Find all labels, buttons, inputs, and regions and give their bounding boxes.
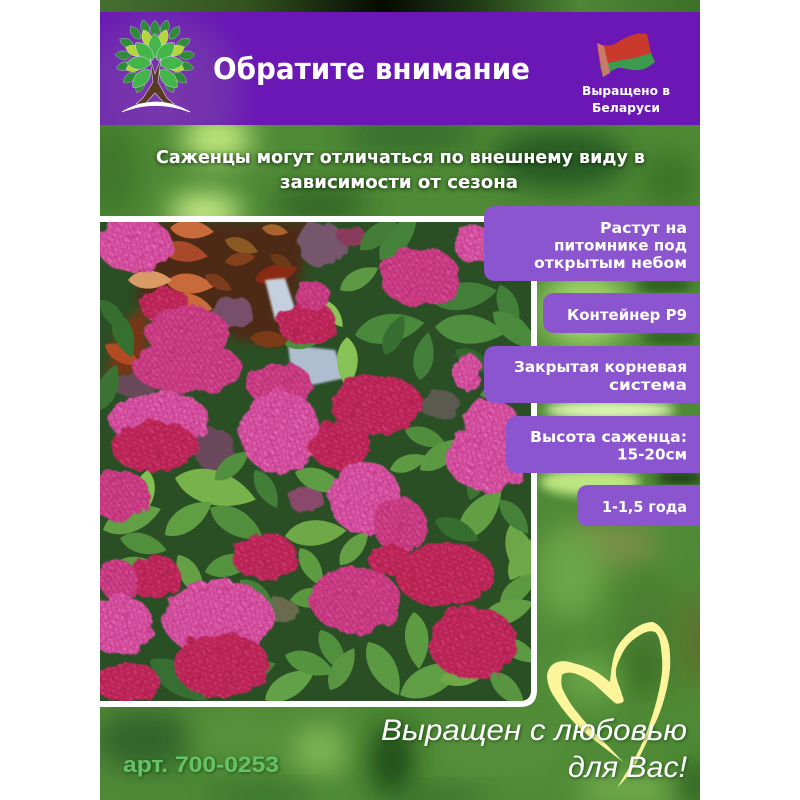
flag caption: Беларуси	[592, 100, 660, 115]
pill: height: 15-20см	[617, 446, 687, 464]
notice text: зависимости от сезона	[280, 173, 518, 193]
icon: Belarus flag	[597, 34, 655, 77]
icon: yellow heart	[547, 622, 670, 788]
pill: nursery: открытым небом	[534, 254, 687, 272]
photo: pink spirea shrub	[100, 222, 531, 701]
pill: age	[577, 485, 700, 526]
pill: nursery: Растут на	[600, 219, 687, 237]
pill: root system	[484, 346, 700, 403]
header band	[100, 12, 700, 125]
pill: height: Высота саженца:	[530, 428, 687, 446]
pill: container: Контейнер Р9	[567, 306, 687, 324]
notice text	[156, 148, 645, 193]
flag caption	[582, 83, 670, 115]
pill: root system: система	[609, 376, 687, 394]
photo frame	[100, 216, 537, 707]
pill: nursery: питомнике под	[554, 236, 687, 254]
tagline: для Вас!	[568, 751, 688, 784]
pill: age: 1-1,5 года	[602, 498, 687, 516]
background: blurred green foliage	[80, 0, 712, 800]
pill: root system: Закрытая корневая	[514, 358, 687, 376]
tagline: Выращен с любовью	[381, 714, 687, 747]
autumn shrub	[101, 219, 460, 622]
pill: height	[506, 416, 700, 473]
icon: tree logo	[115, 19, 195, 112]
flower clusters	[86, 218, 528, 702]
flag caption: Выращено в	[582, 83, 670, 98]
article number: арт. 700-0253	[123, 752, 279, 777]
notice text: Саженцы могут отличаться по внешнему виду в	[156, 148, 645, 168]
pill: nursery	[484, 206, 700, 281]
pill: container	[543, 293, 700, 333]
title: Обратите внимание	[213, 52, 530, 86]
tagline	[381, 714, 688, 784]
leaves	[100, 222, 531, 701]
